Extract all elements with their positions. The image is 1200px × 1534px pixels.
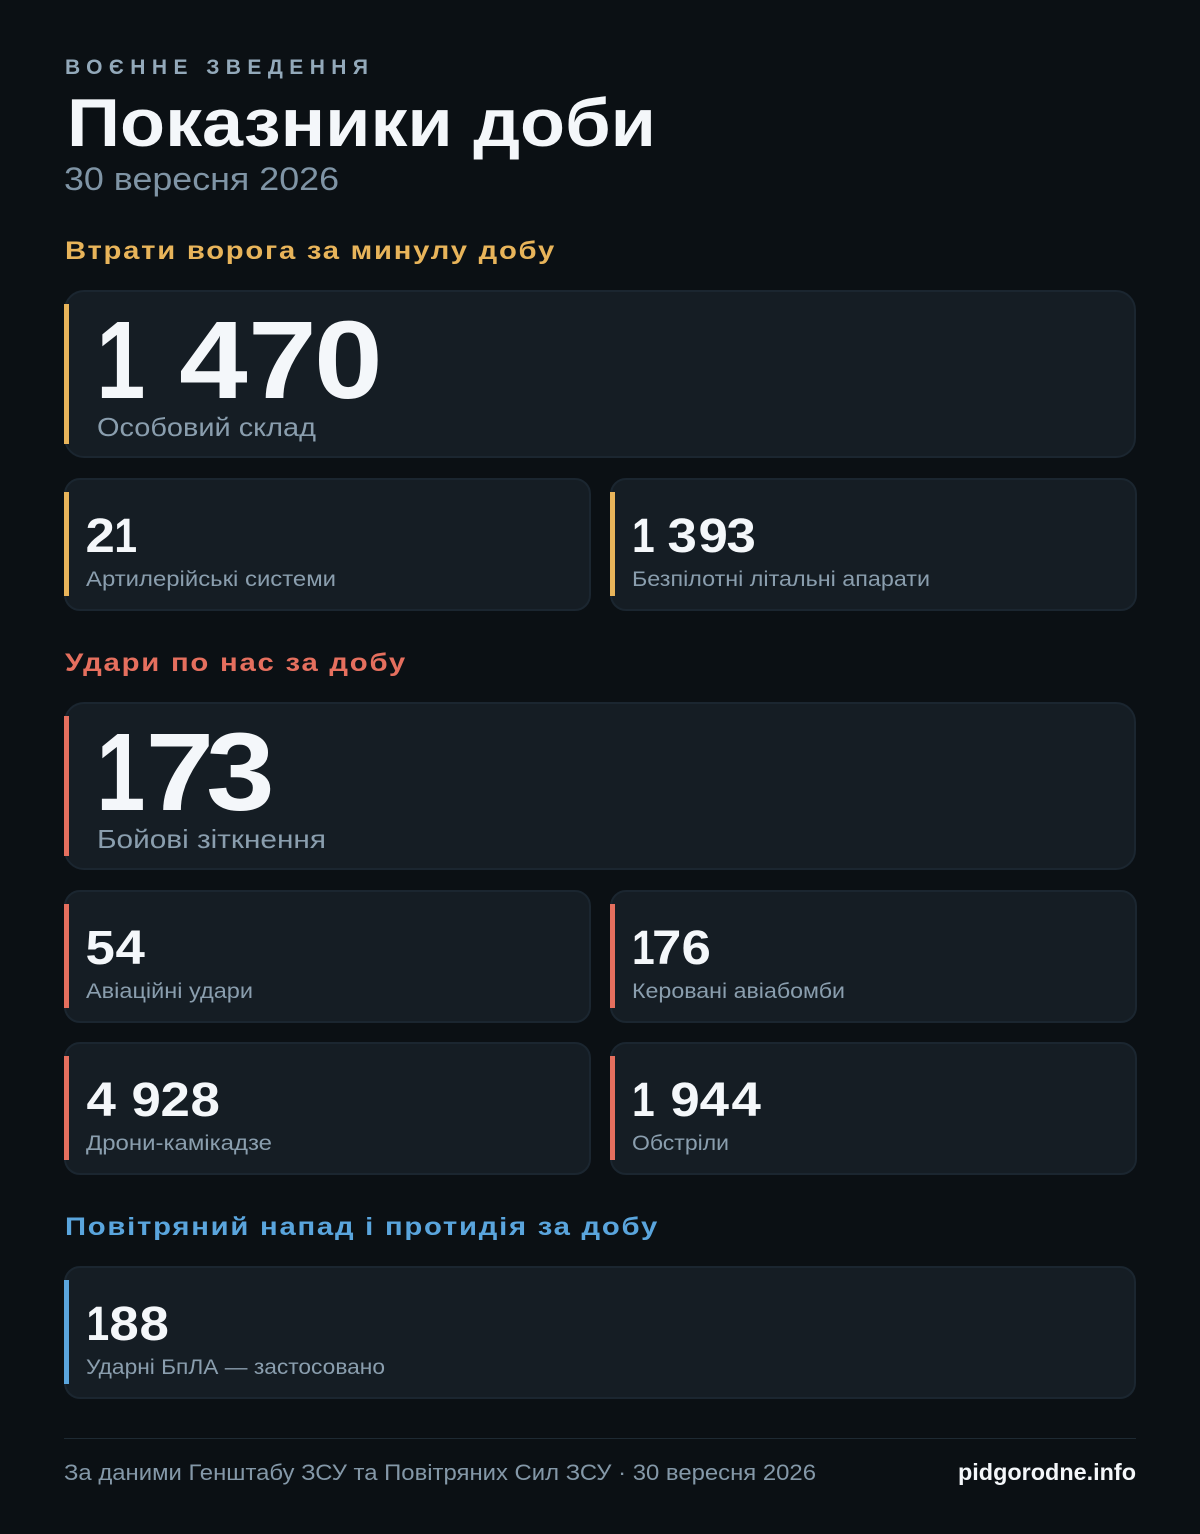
panel: air strikes: 54 bbox=[85, 920, 145, 974]
panel: artillery: 2 bbox=[86, 508, 115, 562]
panel: shelling: 944 bbox=[670, 1072, 761, 1126]
panel: artillery: 1 bbox=[114, 510, 137, 563]
date: 30 вересня 2026 bbox=[64, 161, 339, 197]
footer site: pidgorodne.info bbox=[958, 1459, 1136, 1485]
panel: guided bombs: 1 bbox=[632, 922, 655, 975]
panel: clashes: 1 bbox=[96, 712, 145, 834]
panel: guided bombs: 76 bbox=[652, 920, 711, 974]
panel: kamikaze drones: Дрони-камікадзе bbox=[86, 1132, 272, 1155]
panel: clashes: 73 bbox=[146, 710, 275, 834]
panel: shelling: 1 bbox=[632, 1074, 655, 1127]
panel: shelling: Обстріли bbox=[632, 1132, 729, 1155]
title: Показники доби bbox=[67, 85, 656, 161]
eyebrow: ВОЄННЕ ЗВЕДЕННЯ bbox=[65, 56, 368, 79]
panel: personnel: 470 bbox=[179, 298, 383, 422]
heading: strikes: Удари по нас за добу bbox=[65, 649, 407, 677]
panel: UAVs: Безпілотні літальні апарати bbox=[632, 568, 930, 591]
panel: air strikes: Авіаційні удари bbox=[86, 980, 253, 1003]
panel: guided bombs bbox=[610, 891, 1136, 1022]
panel: personnel bbox=[64, 291, 1135, 457]
heading: enemy losses: Втрати ворога за минулу добу bbox=[65, 237, 556, 265]
panel: guided bombs: Керовані авіабомби bbox=[632, 980, 845, 1003]
panel: strike UAVs: 88 bbox=[109, 1296, 169, 1350]
panel: strike UAVs: 1 bbox=[86, 1298, 109, 1351]
panel: artillery bbox=[64, 479, 590, 610]
panel: clashes: Бойові зіткнення bbox=[97, 824, 326, 854]
header bbox=[64, 56, 656, 197]
footer source: За даними Генштабу ЗСУ та Повітряних Сил ЗСУ · 30 вересня 2026 bbox=[64, 1460, 816, 1485]
panel: strike UAVs bbox=[64, 1267, 1135, 1398]
panel: artillery: Артилерійські системи bbox=[86, 568, 336, 591]
panel: UAVs: 1 bbox=[632, 510, 655, 563]
panel: personnel: Особовий склад bbox=[97, 412, 316, 442]
panel: UAVs bbox=[610, 479, 1136, 610]
panel: UAVs: 393 bbox=[667, 508, 756, 562]
heading: air attack: Повітряний напад і протидія за добу bbox=[65, 1213, 659, 1241]
panel: air strikes bbox=[64, 891, 590, 1022]
panel: strike UAVs: Ударні БпЛА — застосовано bbox=[86, 1356, 385, 1379]
panel: shelling bbox=[610, 1043, 1136, 1174]
panel: clashes bbox=[64, 703, 1135, 869]
panel: kamikaze drones: 4 928 bbox=[86, 1072, 220, 1126]
panel: personnel: 1 bbox=[96, 300, 145, 422]
panel: kamikaze drones bbox=[64, 1043, 590, 1174]
